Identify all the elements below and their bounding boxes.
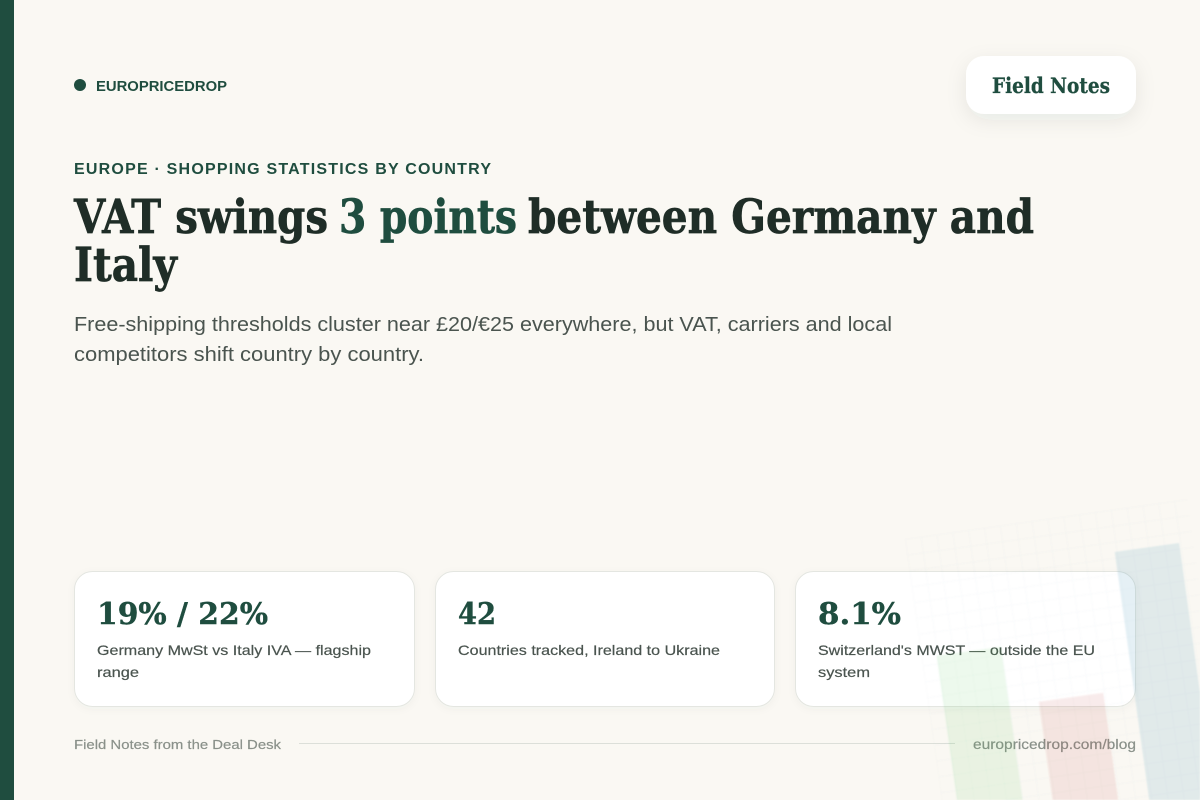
stat card: Switzerland: Switzerland's MWST — outside the EU (818, 642, 1095, 658)
stat card: Switzerland: system (818, 664, 870, 680)
stat card: Germany vs Italy: Germany MwSt vs Italy IVA — flagship (97, 642, 371, 658)
title: between Germany and (528, 190, 1034, 245)
subtitle (74, 314, 892, 366)
title (73, 190, 1034, 293)
stat card: Germany vs Italy (74, 572, 414, 706)
badge: Field Notes (966, 56, 1136, 114)
stat card: Switzerland: 8.1% (818, 597, 901, 632)
stat card: countries tracked: Countries tracked, Ireland to Ukraine (458, 642, 720, 658)
stat card: Germany vs Italy: range (97, 664, 139, 680)
stat card: Germany vs Italy: 19% / 22% (97, 597, 268, 632)
badge: Field Notes: Field Notes (992, 73, 1110, 98)
subtitle: competitors shift country by country. (74, 344, 424, 366)
footer: europricedrop.com/blog (973, 736, 1136, 752)
subtitle: Free-shipping thresholds cluster near £20/€25 everywhere, but VAT, carriers and local (74, 314, 892, 336)
stat card: countries tracked: 42 (458, 597, 496, 632)
accent bar (0, 0, 14, 800)
brand (74, 79, 227, 95)
stat card: Switzerland (796, 572, 1136, 706)
icon: brand dot (74, 79, 86, 91)
footer: Field Notes from the Deal Desk (74, 737, 282, 752)
brand name: EUROPRICEDROP (96, 79, 227, 95)
title: Italy (74, 238, 178, 293)
watermark chart (905, 499, 1200, 800)
stat card: countries tracked (436, 572, 774, 706)
footer (74, 736, 1136, 752)
title: VAT swings (73, 190, 328, 245)
title: 3 points (339, 190, 517, 245)
eyebrow: EUROPE · SHOPPING STATISTICS BY COUNTRY (74, 161, 491, 178)
